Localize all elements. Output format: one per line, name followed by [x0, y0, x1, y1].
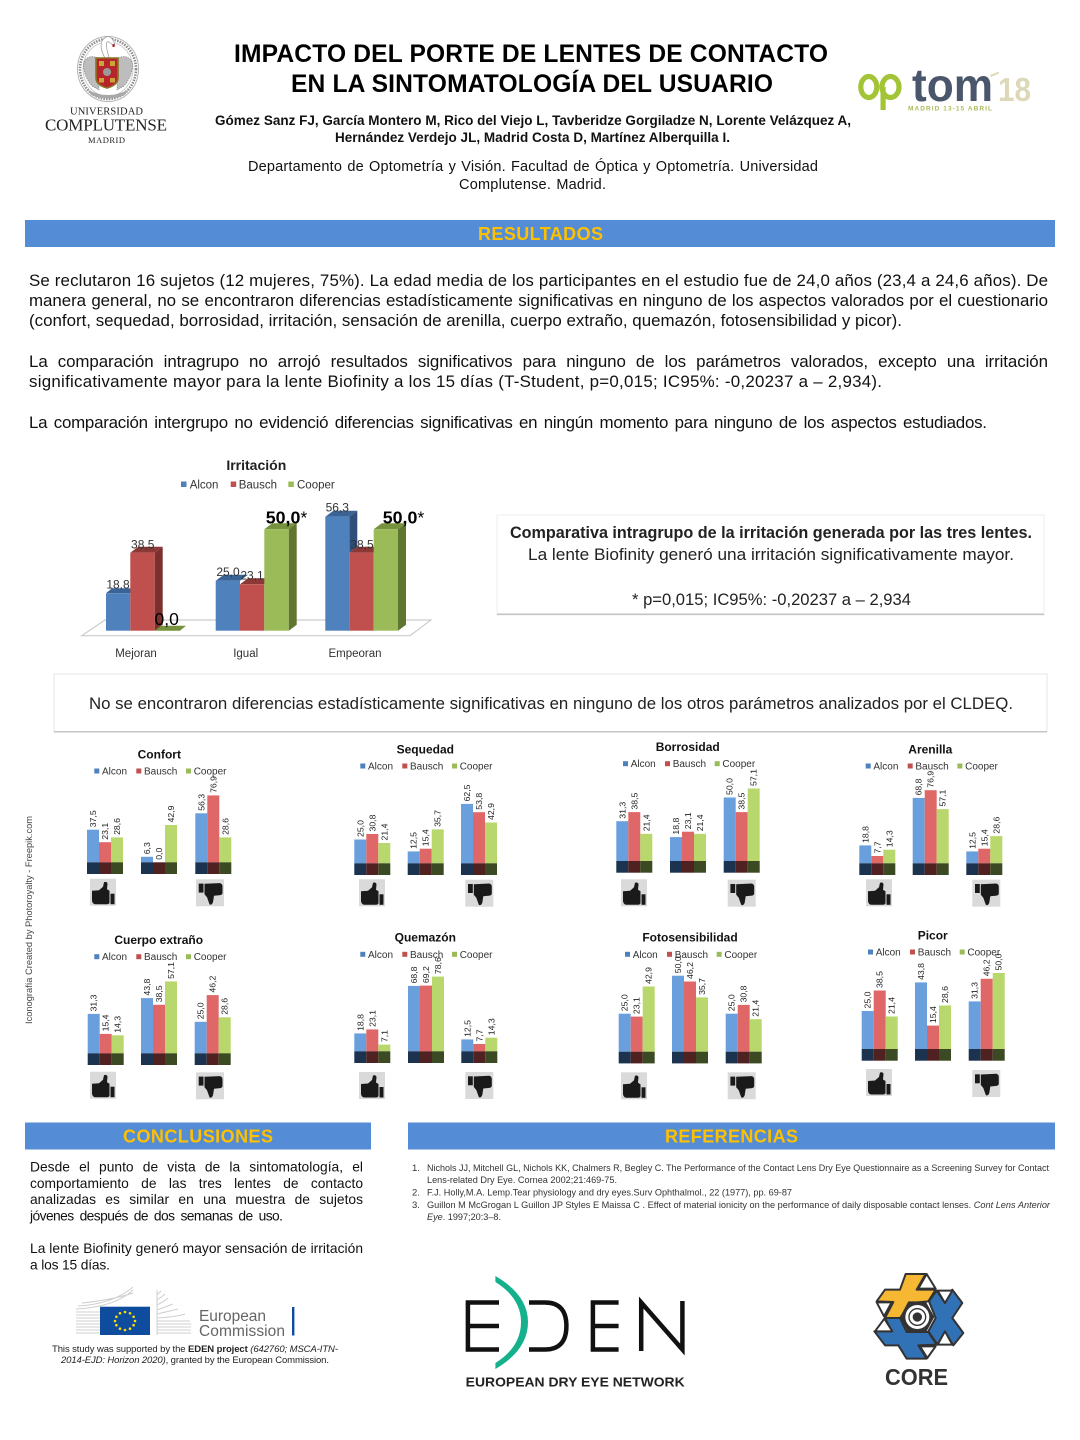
value labels: 18,8 [671, 818, 681, 835]
value labels: 15,4 [101, 1014, 111, 1031]
value labels: 23,1 [632, 997, 642, 1014]
authors: Hernández Verdejo JL, Madrid Costa D, Martínez Alberquilla I. [335, 130, 730, 145]
callout: intragroup comparison: Comparativa intragrupo de la irritación generada por las tres lentes. [510, 524, 1032, 542]
section header: referencias [408, 1122, 1055, 1150]
value labels: 14,3 [486, 1018, 496, 1035]
value labels: 25,0 [216, 565, 240, 579]
value labels: 50,0* [383, 508, 424, 528]
text: European Commission wordmark [199, 1308, 285, 1340]
text block: conclusions: Desde el punto de vista de la sintomatología, el [30, 1160, 363, 1174]
value labels: 78,6 [433, 957, 443, 974]
text: European Commission wordmark: European [199, 1308, 266, 1325]
value labels [863, 953, 1004, 1023]
value labels: 38,5 [737, 793, 747, 810]
value labels: 15,4 [979, 829, 989, 846]
bars [859, 790, 1002, 875]
text: university name: UNIVERSIDAD [70, 106, 143, 118]
chart: Fotosensibilidad [619, 930, 762, 1099]
legend: Alcon [190, 480, 218, 492]
icon: thumb up [866, 879, 892, 906]
callout: no differences [54, 674, 1047, 732]
logo: optom 18: tom [912, 59, 993, 111]
title: IMPACTO DEL PORTE DE LENTES DE CONTACTO [234, 41, 828, 68]
text block: results: significativamente mayor para la lente Biofinity a los 15 días (T-Student, p=0,015; IC95%: -0,20237 a – 2,934). [29, 372, 882, 391]
callout: intragroup comparison [497, 515, 1044, 615]
legend: Alcon [633, 950, 658, 961]
floor [82, 620, 431, 636]
bars: Empeoran [325, 511, 406, 631]
legend: Bausch [144, 766, 177, 778]
chart: Sequedad [354, 743, 497, 907]
text block: results [29, 271, 1048, 432]
callout: intragroup comparison: * p=0,015; IC95%: -0,20237 a – 2,934 [632, 591, 911, 609]
value labels: 50,0* [266, 508, 307, 528]
chart: Irritación 3D bar chart [82, 457, 431, 660]
value labels [106, 501, 424, 629]
value labels: 23,1 [367, 1010, 377, 1027]
value labels: 50,0 [725, 778, 735, 795]
icon: thumb up [90, 1072, 116, 1099]
value labels: 7,1 [379, 1030, 389, 1042]
callout: intragroup comparison: La lente Biofinity generó una irritación significativamente mayor. [528, 546, 1014, 564]
value labels: 76,9 [208, 776, 218, 793]
value labels [89, 962, 230, 1033]
text: funding acknowledgement: This study was supported by the EDEN project (642760; MSCA-ITN- [52, 1344, 338, 1355]
icon: thumb up [866, 1069, 892, 1096]
value labels: 43,8 [916, 963, 926, 980]
chart title: Picor [918, 928, 948, 942]
text block: references: 1. [412, 1163, 420, 1174]
legend: Bausch [144, 952, 177, 963]
category labels: Mejoran [115, 648, 157, 660]
text block: results: Se reclutaron 16 sujetos (12 mujeres, 75%). La edad media de los participantes en el estudio fue de 24,0 años (23,4 a 24,6 años). De [29, 271, 1048, 290]
chart title: Sequedad [397, 743, 454, 757]
chart title: Irritación [226, 457, 286, 473]
icon: thumb up [359, 879, 385, 906]
text block: results: La comparación intergrupo no evidenció diferencias significativas en ningún momento para ninguno de los aspectos estudiados. [29, 413, 987, 432]
icon: crest [78, 36, 138, 102]
legend [94, 766, 227, 778]
value labels: 53,8 [474, 793, 484, 810]
value labels: 28,6 [112, 818, 122, 835]
text block: references: F.J. Holly,M.A. Lemp.Tear physiology and dry eyes.Surv Ophthalmol., 22 (1977), pp. 69-87 [427, 1188, 792, 1198]
authors [215, 113, 851, 145]
legend: Bausch [675, 950, 708, 961]
value labels: 23,1 [240, 568, 264, 582]
text block: conclusions: La lente Biofinity generó mayor sensación de irritación [30, 1241, 363, 1256]
text block: results: (confort, sequedad, borrosidad, irritación, sensación de arenilla, cuerpo extraño, quemazón, fotosensibilidad y picor). [29, 311, 902, 330]
affiliation: Departamento de Optometría y Visión. Facultad de Óptica y Optometría. Universidad [248, 158, 818, 175]
text block: references: Eye. 1997;20:3–8. [427, 1212, 501, 1223]
icon: thumb up [90, 879, 116, 906]
value labels: 35,7 [433, 810, 443, 827]
affiliation: Complutense. Madrid. [459, 177, 606, 193]
logo: optom 18 [861, 59, 1031, 112]
value labels: 30,8 [367, 814, 377, 832]
text: European Commission wordmark: Commission [199, 1323, 285, 1340]
icon: thumb down [728, 1072, 756, 1099]
chart title: Arenilla [908, 743, 953, 757]
value labels: 50,0 [994, 953, 1004, 970]
icon: hexagon mark [874, 1274, 963, 1359]
value labels [88, 776, 230, 860]
legend: Bausch [239, 480, 277, 492]
text: university name: COMPLUTENSE [45, 116, 167, 134]
value labels: 30,8 [739, 985, 749, 1002]
value labels: 31,3 [89, 994, 99, 1011]
chart title: Quemazón [395, 931, 456, 945]
text block: references: Nichols JJ, Mitchell GL, Nichols KK, Chalmers R, Begley C. The Performance of the Contact Lens Dry Eye Questionnaire as a Screening Survey for Contact [427, 1163, 1049, 1174]
value labels: 43,8 [142, 979, 152, 996]
value labels: 42,9 [486, 803, 496, 820]
value labels: 0,0 [154, 848, 164, 860]
section header: referencias: REFERENCIAS [665, 1126, 798, 1146]
legend: Cooper [965, 762, 999, 772]
bars: Mejoran [106, 547, 186, 631]
category labels: Igual [233, 648, 258, 660]
chart: Cuerpo extraño [88, 933, 231, 1099]
value labels: 7,7 [474, 1029, 484, 1042]
chart title: Cuerpo extraño [114, 933, 203, 947]
value labels: 42,9 [644, 967, 654, 984]
value labels: 12,5 [462, 1020, 472, 1037]
text: funding acknowledgement [52, 1344, 338, 1366]
value labels: 12,5 [409, 832, 419, 849]
icon: eye [900, 1301, 934, 1333]
legend: Alcon [102, 952, 127, 963]
logo: optom 18: 18 [998, 71, 1031, 108]
value labels: 76,9 [926, 771, 936, 788]
legend: Bausch [915, 762, 949, 772]
legend [94, 952, 227, 963]
text block: conclusions: analizadas es similar en una muestra de sujetos [30, 1192, 363, 1207]
logo: Universidad Complutense [45, 36, 167, 145]
text block: references [412, 1163, 1051, 1223]
value labels: 21,4 [751, 1000, 761, 1017]
value labels: 56,3 [326, 501, 349, 515]
section header: conclusiones [25, 1122, 371, 1150]
bars [354, 977, 497, 1063]
value labels: 38,5 [629, 793, 639, 810]
legend [360, 762, 493, 772]
text block: references: Guillon M McGrogan L Guillon JP Styles E Maissa C . Effect of material ionicity on the performance of daily disposable contact lenses. Cont Lens Anterior [427, 1200, 1051, 1211]
value labels: 56,3 [196, 794, 206, 811]
icon: thumb up [621, 1072, 647, 1099]
value labels: 35,7 [697, 978, 707, 995]
value labels: 21,4 [379, 823, 389, 840]
value labels: 25,0 [863, 991, 873, 1008]
title [234, 41, 828, 98]
text block: conclusions [29, 1160, 363, 1272]
text block: conclusions: jóvenes después de dos semanas de uso. [29, 1208, 283, 1224]
value labels [860, 771, 1001, 854]
value labels: 31,3 [617, 802, 627, 819]
icon: building lines [76, 1287, 191, 1335]
value labels: 42,9 [166, 805, 176, 822]
value labels: 28,6 [991, 817, 1001, 834]
value labels: 15,4 [421, 829, 431, 846]
legend [866, 762, 999, 772]
value labels [620, 956, 761, 1017]
value labels: 18,8 [106, 578, 130, 592]
chart: Arenilla [859, 743, 1002, 907]
legend: Cooper [194, 766, 227, 778]
legend: Alcon [873, 762, 898, 772]
icon: green arc [495, 1276, 528, 1369]
value labels: 50,0 [673, 956, 683, 973]
bars [616, 788, 760, 873]
value labels: 18,8 [355, 1014, 365, 1031]
icon: thumb down [972, 1070, 1000, 1097]
icon: thumb down [972, 880, 1000, 907]
text block: references: 3. [412, 1200, 420, 1211]
value labels: 38,5 [350, 538, 374, 552]
bars [862, 973, 1005, 1061]
value labels: 25,0 [196, 1002, 206, 1019]
value labels: 69,2 [421, 966, 431, 983]
title: EN LA SINTOMATOLOGÍA DEL USUARIO [291, 70, 773, 98]
legend: Bausch [410, 950, 443, 961]
value labels: 46,2 [208, 976, 218, 993]
vertical credit text: Iconografía Created by Photoroyalty - Freepik.com [24, 816, 35, 1024]
affiliation [248, 158, 818, 193]
legend: Cooper [722, 759, 756, 770]
icon: thumb down [465, 880, 493, 907]
icon: thumb up [621, 879, 647, 906]
value labels: 57,1 [749, 769, 759, 786]
chart: Borrosidad [616, 740, 760, 907]
legend: Alcon [368, 950, 393, 961]
icon: thumb down [728, 880, 756, 907]
icon: thumb down [465, 1072, 493, 1099]
legend: Cooper [460, 950, 493, 961]
text block: conclusions: a los 15 días. [30, 1258, 110, 1272]
value labels: 25,0 [620, 994, 630, 1011]
letters [468, 1301, 682, 1351]
legend [360, 950, 493, 961]
chart title: Confort [138, 748, 181, 762]
legend: Alcon [876, 948, 901, 958]
text block: references: Lens-related Dry Eye. Cornea 2002;21:469-75. [427, 1175, 617, 1186]
value labels: 25,0 [355, 820, 365, 837]
legend: Bausch [673, 759, 706, 770]
value labels: 21,4 [887, 997, 897, 1014]
bars [87, 795, 231, 874]
authors: Gómez Sanz FJ, García Montero M, Rico del Viejo L, Tavberidze Gorgiladze N, Lorente Velázquez A, [215, 113, 851, 128]
legend [868, 948, 1001, 958]
text block: results: manera general, no se encontraron diferencias estadísticamente significativas en ninguno de los aspectos valorados por el cuestionario [29, 291, 1048, 310]
text: university name [45, 106, 167, 145]
value labels: 21,4 [695, 814, 705, 831]
legend: Cooper [724, 950, 758, 961]
bars [88, 981, 231, 1065]
icon: thumb down [196, 1072, 224, 1099]
value labels [355, 784, 496, 849]
section header: resultados [25, 220, 1055, 247]
chart: Picor [862, 928, 1005, 1097]
logo: optom 18: MADRID 13-15 ABRIL [908, 106, 992, 112]
value labels: 28,6 [940, 986, 950, 1003]
value labels: 21,4 [641, 814, 651, 831]
value labels: 25,0 [727, 994, 737, 1011]
legend: Cooper [194, 952, 227, 963]
logo: European Commission [76, 1287, 294, 1340]
value labels: 6,3 [142, 842, 152, 854]
legend: Bausch [918, 948, 951, 958]
legend: Alcon [631, 759, 656, 770]
legend: Alcon [368, 762, 393, 772]
category labels [115, 648, 382, 660]
value labels: 68,8 [409, 966, 419, 983]
value labels: 14,3 [884, 830, 894, 847]
logo: EDEN [466, 1276, 685, 1390]
value labels: 0,0 [155, 609, 179, 629]
value labels: 68,8 [914, 778, 924, 795]
bars [619, 976, 762, 1063]
value labels: 18,8 [860, 826, 870, 843]
value labels: 62,5 [462, 784, 472, 801]
value labels: 23,1 [683, 812, 693, 829]
legend [625, 950, 758, 961]
callout: no differences: No se encontraron diferencias estadísticamente significativas en ninguno de los otros parámetros analizados por el CLDEQ. [89, 695, 1013, 713]
legend [623, 759, 756, 770]
section header: resultados: RESULTADOS [478, 224, 603, 244]
value labels: 38,5 [131, 538, 155, 552]
legend: Alcon [102, 766, 127, 778]
logo: CORE [874, 1274, 963, 1390]
value labels: 46,2 [685, 962, 695, 979]
text: university name: MADRID [88, 135, 125, 145]
section header: conclusiones: CONCLUSIONES [123, 1126, 273, 1146]
text block: references: 2. [412, 1188, 420, 1198]
network tagline: EUROPEAN DRY EYE NETWORK [466, 1374, 685, 1390]
value labels: 57,1 [166, 962, 176, 979]
legend: Bausch [410, 762, 443, 772]
value labels: 46,2 [982, 959, 992, 976]
legend: Cooper [967, 948, 1001, 958]
value labels: 7,7 [872, 841, 882, 854]
value labels: 57,1 [938, 790, 948, 807]
legend: Cooper [297, 480, 335, 492]
value labels [617, 769, 759, 835]
value labels: 15,4 [928, 1006, 938, 1023]
text: funding acknowledgement: 2014-EJD: Horizon 2020), granted by the European Commission. [60, 1355, 329, 1366]
bars [354, 804, 497, 875]
chart: Confort [87, 748, 231, 906]
value labels: 37,5 [88, 810, 98, 827]
icon: thumb up [359, 1072, 385, 1099]
text block: conclusions: comportamiento de las tres lentes de contacto [30, 1176, 363, 1191]
category labels: Empeoran [328, 648, 382, 660]
text: CORE: CORE [885, 1364, 948, 1390]
icon: EU flag [100, 1307, 150, 1335]
value labels: 28,6 [220, 998, 230, 1015]
value labels: 14,3 [113, 1016, 123, 1033]
value labels: 23,1 [100, 823, 110, 840]
value labels: 28,6 [220, 818, 230, 835]
chart title: Fotosensibilidad [642, 930, 738, 944]
chart title: Borrosidad [656, 740, 720, 754]
value labels: 38,5 [154, 985, 164, 1002]
value labels: 38,5 [875, 971, 885, 988]
value labels: 12,5 [967, 832, 977, 849]
legend [181, 480, 335, 492]
bars: Igual [216, 523, 297, 631]
legend: Cooper [460, 762, 493, 772]
chart: Quemazón [354, 931, 497, 1099]
value labels: 31,3 [970, 982, 980, 999]
value labels [355, 957, 496, 1042]
text block: results: La comparación intragrupo no arrojó resultados significativos para ninguno de los parámetros valorados, excepto una irritación [29, 352, 1048, 371]
icon: thumb down [196, 879, 224, 906]
